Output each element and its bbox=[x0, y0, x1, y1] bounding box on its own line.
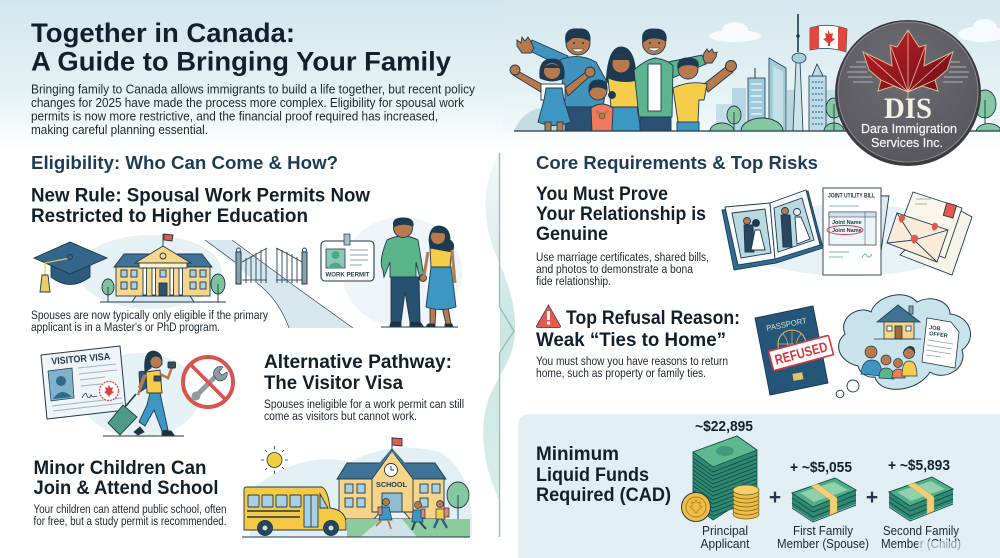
new rule text: Spouses are now typically only eligible if the primary bbox=[31, 308, 269, 322]
panel: minimum liquid funds bbox=[518, 414, 1000, 558]
panel: new rule spousal permits bbox=[31, 184, 462, 334]
intro text block: permits is now more restrictive, and the financial proof required has increased, bbox=[31, 108, 438, 124]
panel: visitor visa bbox=[41, 346, 464, 437]
label: second family member bbox=[881, 523, 961, 551]
relationship heading: Genuine bbox=[536, 223, 608, 245]
amount: child: + ~$5,893 bbox=[888, 458, 950, 474]
funds heading bbox=[536, 443, 671, 506]
refusal text bbox=[536, 354, 728, 380]
relationship text: and photos to demonstrate a bona bbox=[536, 262, 693, 276]
ground line bbox=[514, 130, 1000, 132]
background hill bbox=[514, 108, 560, 131]
visitor visa heading bbox=[264, 351, 452, 394]
amount: spouse: + ~$5,055 bbox=[790, 460, 852, 476]
icon: visitor visa card bbox=[41, 346, 126, 419]
relationship text: fide relationship. bbox=[536, 274, 611, 288]
children text: for free, but a study permit is recommended. bbox=[34, 514, 226, 528]
funds heading: Required (CAD) bbox=[536, 484, 671, 506]
relationship heading: Your Relationship is bbox=[536, 203, 706, 225]
children heading bbox=[34, 457, 218, 499]
new rule heading: Restricted to Higher Education bbox=[31, 205, 308, 227]
mother in yellow bbox=[606, 47, 641, 131]
road bbox=[205, 240, 353, 328]
visitor visa text bbox=[264, 397, 464, 423]
panel: minor children bbox=[34, 437, 472, 537]
logo: Dara Immigration Services bbox=[835, 20, 981, 166]
clouds bbox=[709, 19, 1000, 42]
panel: relationship proof bbox=[536, 183, 972, 288]
intro text block: Bringing family to Canada allows immigrants to build a life together, but recent policy bbox=[31, 82, 475, 96]
thought family bbox=[861, 346, 917, 379]
center divider with chevron bbox=[483, 153, 515, 537]
visitor visa heading: The Visitor Visa bbox=[264, 372, 403, 394]
icon: refused passport bbox=[755, 306, 834, 395]
CN tower bbox=[797, 14, 799, 52]
refusal heading: Weak “Ties to Home” bbox=[536, 329, 726, 351]
school building bbox=[337, 437, 470, 537]
icon: joint utility bill bbox=[823, 188, 889, 275]
icon: visitor visa card: VISITOR VISA bbox=[51, 351, 111, 368]
new rule text: applicant is in a Master's or PhD program. bbox=[31, 320, 220, 334]
icon: no work wrench bbox=[183, 357, 233, 407]
father in green bbox=[634, 29, 717, 131]
new rule heading bbox=[31, 184, 371, 227]
illustration: couple holding hands bbox=[381, 218, 458, 327]
logo: Dara Immigration Services: Dara Immigration bbox=[861, 122, 957, 136]
father in blue bbox=[517, 29, 607, 131]
refusal heading: Top Refusal Reason: bbox=[566, 307, 740, 329]
amount: principal: ~$22,895 bbox=[695, 419, 753, 435]
relationship heading: You Must Prove bbox=[536, 183, 668, 205]
new rule heading: New Rule: Spousal Work Permits Now bbox=[31, 184, 371, 206]
intro text block bbox=[31, 82, 475, 137]
children walking bbox=[376, 498, 449, 530]
icon: spouse money stack bbox=[792, 478, 856, 522]
relationship text: Use marriage certificates, shared bills, bbox=[536, 250, 709, 264]
job offer paper: JOB bbox=[929, 325, 941, 333]
illustration: traveller with suitcase bbox=[103, 351, 184, 436]
relationship text bbox=[536, 250, 709, 288]
plus sign: + bbox=[769, 486, 781, 509]
funds heading: Minimum bbox=[536, 443, 619, 465]
icon: work permit badge bbox=[321, 234, 374, 281]
icon: gate bbox=[236, 248, 307, 284]
trees and shrubs bbox=[710, 90, 1000, 131]
watermark smear bbox=[918, 541, 990, 551]
label: second family member: Member (Child) bbox=[881, 536, 961, 551]
refusal text: home, such as property or family ties. bbox=[536, 366, 706, 380]
label: first family member bbox=[777, 523, 869, 551]
plus sign: + bbox=[866, 486, 878, 509]
label: principal applicant: Principal bbox=[702, 523, 748, 538]
icon: joint utility bill: JOINT UTILITY BILL bbox=[828, 194, 875, 200]
Canadian flag bbox=[810, 25, 847, 52]
icon: sun bbox=[261, 446, 288, 474]
children heading: Join & Attend School bbox=[34, 477, 218, 499]
icon: child money stack bbox=[889, 477, 953, 521]
funds heading: Liquid Funds bbox=[536, 464, 649, 486]
header illustration: sky, city and family bbox=[503, 0, 1000, 131]
children text bbox=[34, 502, 226, 528]
boy in yellow bbox=[673, 58, 736, 131]
maple leaf bbox=[863, 30, 953, 100]
large coin bbox=[682, 492, 710, 522]
logo stripes bbox=[847, 62, 969, 82]
refusal heading bbox=[536, 307, 740, 351]
icon: large money stack with coins bbox=[682, 436, 759, 522]
school bus bbox=[242, 487, 470, 537]
intro text block: making careful planning essential. bbox=[31, 122, 208, 137]
icon: refused passport: REFUSED bbox=[773, 338, 829, 368]
label: first family member: First Family bbox=[793, 523, 854, 538]
icon: work permit badge: WORK PERMIT bbox=[326, 272, 370, 278]
family group bbox=[510, 29, 736, 131]
visitor visa text: come as visitors but cannot work. bbox=[264, 409, 417, 423]
icon: thought bubble bbox=[836, 295, 971, 398]
icon: joint utility bill: Joint Name bbox=[832, 228, 862, 234]
illustration: school and bus bbox=[242, 437, 472, 537]
logo: Dara Immigration Services: Services Inc. bbox=[871, 136, 943, 150]
panel: top refusal reason bbox=[536, 295, 971, 398]
new rule illustrations bbox=[34, 217, 462, 328]
header sky gradient bbox=[0, 0, 1000, 150]
label: first family member: Member (Spouse) bbox=[777, 536, 869, 551]
school building: SCHOOL bbox=[376, 480, 407, 489]
house bbox=[874, 305, 921, 339]
intro text block: changes for 2025 have made the process more complex. Eligibility for spousal work bbox=[31, 95, 464, 110]
title: A Guide to Bringing Your Family bbox=[31, 46, 451, 76]
icon: wedding photo album bbox=[722, 190, 823, 270]
icon: university building bbox=[100, 234, 226, 302]
icon: joint utility bill: Joint Name bbox=[832, 220, 862, 226]
visitor visa text: Spouses ineligible for a work permit can still bbox=[264, 397, 464, 411]
title bbox=[31, 18, 451, 76]
title: Together in Canada: bbox=[31, 18, 295, 48]
icon: refused passport: PASSPORT bbox=[766, 316, 808, 333]
visitor visa heading: Alternative Pathway: bbox=[264, 351, 452, 373]
label: second family member: Second Family bbox=[883, 523, 960, 538]
children text: Your children can attend public school, often bbox=[34, 502, 226, 516]
section heading: core requirements: Core Requirements & Top Risks bbox=[536, 152, 818, 173]
girl in blue dress bbox=[510, 59, 595, 131]
new rule text bbox=[31, 308, 269, 334]
refusal text: You must show you have reasons to return bbox=[536, 354, 728, 368]
relationship heading bbox=[536, 183, 706, 245]
job offer paper: OFFER bbox=[929, 331, 948, 340]
section heading: eligibility: Eligibility: Who Can Come & How? bbox=[31, 152, 338, 173]
label: principal applicant bbox=[700, 523, 750, 551]
city skyline bbox=[716, 14, 840, 131]
coin stack bbox=[733, 485, 759, 519]
icon: love letters bbox=[887, 192, 972, 275]
icon: graduation cap bbox=[34, 242, 107, 292]
DIS: DIS bbox=[884, 92, 932, 125]
label: principal applicant: Applicant bbox=[700, 536, 750, 551]
icon: warning triangle bbox=[536, 305, 561, 328]
small child in red bbox=[589, 80, 616, 131]
job offer paper bbox=[922, 318, 959, 368]
children heading: Minor Children Can bbox=[34, 457, 206, 479]
